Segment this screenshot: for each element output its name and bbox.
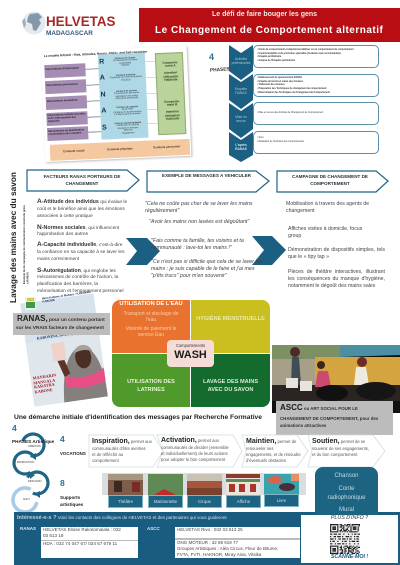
connector lines <box>86 61 158 133</box>
title banner <box>139 8 400 42</box>
text: RANAS factors <box>37 198 127 294</box>
quadrant: latrines: UTILISATION DES <box>127 379 175 385</box>
process: RANAS phases: Enquête <box>235 87 247 91</box>
WASH centre label: Comportements <box>176 343 205 348</box>
icon: globe <box>22 12 46 34</box>
label RANAS: RANAS <box>20 526 36 530</box>
phase chevrons <box>229 45 253 162</box>
factor attitude: A-Attitude des individus qui évalue le <box>37 198 127 205</box>
poster names: MANGALA <box>33 377 55 385</box>
phases text: PHASES <box>210 67 230 74</box>
vocation maintien: renouveler ses <box>246 446 273 451</box>
callout ASCC first line: ASCC ou ART SOCIAL POUR LE <box>280 402 358 412</box>
phases artistic label: PHASES Artistique <box>12 439 54 444</box>
label ASCC: ASCC <box>147 526 160 530</box>
context row: Contexte social <box>63 148 84 153</box>
phase 1 details: • Communicabilité et de promotion spécialisé (focalisée mais recommandée) <box>257 53 341 55</box>
number 4: 4 <box>60 434 65 444</box>
vocation inspiration <box>92 438 152 463</box>
phase 2 details: • Établissement du questionnaire RANAS <box>257 77 302 79</box>
behaviour column: Utilisation <box>163 74 178 78</box>
WASH centre label <box>167 340 214 367</box>
intervention boxes: Interventions d'information <box>45 67 79 71</box>
quadrant: water use <box>112 300 190 353</box>
quadrant: water use: Volonté de paiement le <box>126 326 176 332</box>
RANAS factors column: Facteurs de normes <box>116 90 137 93</box>
logo wordmark: HELVETAS <box>46 14 115 29</box>
RANAS contact box <box>41 527 138 558</box>
diagram title: Le modèle RANAS : Risk, Attitudes, Norms, Ability, and Self-regulation <box>44 50 147 58</box>
QR code <box>330 524 360 554</box>
poster caption: KABONINA, DELEQUE, CSB <box>37 330 87 341</box>
header 3 shape <box>276 170 389 193</box>
media item: radio <box>315 484 378 502</box>
label: 8 artistic supports <box>60 479 90 509</box>
arrow: messages to campaign <box>252 236 286 265</box>
label: theatre <box>108 495 143 508</box>
factor attitude: associées à cette pratique <box>37 214 93 219</box>
label: book: Livre <box>277 498 286 503</box>
callout ASCC text: CHANGEMENT DE COMPORTEMENT, pour des <box>280 416 378 421</box>
poster names: KARATRA <box>34 382 55 390</box>
image: book <box>264 474 299 495</box>
vocation maintien <box>246 437 310 465</box>
quadrant: handwashing: AVEC DU SAVON <box>208 386 253 392</box>
ASCC contact box: FVTA, FVTI, HAKNOR, Miray Aina, Vitsika <box>177 552 261 557</box>
QR box <box>301 515 398 563</box>
quadrant: menstrual hygiene: HYGIÈNE MENSTRUELLE <box>196 316 265 322</box>
chevron outlines <box>88 434 386 468</box>
supports text: artistiques <box>60 502 83 507</box>
factor norms <box>37 224 120 237</box>
column header 3 <box>276 170 389 193</box>
phase 1 details: • Choix du comportement et dépoiler/sensibiliser sur le comportement de comportement <box>257 49 354 51</box>
label: 4 phases <box>209 52 230 74</box>
RANAS factors column: R <box>99 58 104 66</box>
phase 4 details: • Évaluation de l'évolution des comportements <box>257 141 304 143</box>
QR heading: PLUS D'INFO ? <box>331 515 368 521</box>
WASH centre label: WASH <box>174 349 207 361</box>
banner title: Le Changement de Comportement alternatif <box>155 25 383 36</box>
vocation activation <box>161 436 229 462</box>
vocation inspiration: Inspiration, <box>92 438 130 445</box>
callout: ASCC <box>276 401 393 435</box>
header 3 text <box>292 174 368 186</box>
intervention boxes <box>44 63 88 141</box>
column header 1 <box>26 169 140 192</box>
RANAS factors column: S <box>102 124 107 132</box>
phase 4 details: • Suivi <box>257 137 263 139</box>
phase 3 details <box>253 102 379 125</box>
header 2 shape <box>146 170 270 193</box>
poster names <box>32 372 56 394</box>
process: RANAS phases: œuvre <box>236 119 246 123</box>
callout ASCC text <box>280 416 378 428</box>
vocation chevrons <box>88 434 386 468</box>
arrow: factors to messages <box>126 238 160 265</box>
vocation soutien: Soutien, <box>312 438 340 445</box>
media item: song: Chanson <box>334 472 359 478</box>
phase 2 details: • Détermination des Techniques de Changement de Comportement <box>257 92 330 94</box>
header 2 text: EXEMPLE DE MESSAGES A VEHICULER <box>162 173 251 178</box>
campaign item 3: Démonstration de dispositifs simples, tels que le « tipy tap » <box>288 247 385 260</box>
vocation maintien: engagements, et de résoudre <box>246 452 301 457</box>
factor self-regulation: mémorisation et l'engagement personnel <box>37 289 124 294</box>
label: puppet <box>148 495 183 508</box>
phase 1 details: • Analyse de l'Enquête préliminaire <box>257 60 295 62</box>
quadrant: latrines: LATRINES <box>137 386 165 392</box>
factor attitude: coût et le bénéfice ainsi que les émotions <box>37 207 125 212</box>
logo subtitle: MADAGASCAR <box>46 30 93 37</box>
factor norms: N-Normes sociales, qui influencent <box>37 224 119 230</box>
phase labels: préliminaires <box>232 61 250 65</box>
intervention boxes: Interventions infrastructurelles et de renforcement des capacités <box>47 112 86 123</box>
vocation maintien: d'éventuels obstacles <box>246 458 286 463</box>
diagram: RANAS model <box>41 46 191 162</box>
factor self-regulation: mécanismes de contrôle de l'action, la <box>37 275 118 280</box>
RANAS factors column: Comportement des autres <box>114 92 139 96</box>
RANAS factors column: Barrières et solutions <box>118 127 138 130</box>
factor self-regulation: planification des barrières, la <box>37 282 98 287</box>
phase 3 details: • Mise en œuvre des Activités de Changement de Comportement <box>257 112 323 114</box>
text: campaign <box>286 201 385 289</box>
vocation maintien: permet de <box>278 439 296 444</box>
poster names: MANDARIN <box>32 372 56 381</box>
heading: formative research: Une démarche initiale d'identification des messages par Recherche Formative <box>14 414 262 421</box>
context row: Contexte personnel <box>153 144 180 149</box>
RANAS factors column: Sévérité <box>121 65 129 67</box>
WASH matrix <box>112 300 270 407</box>
phase 2 details: • Préparation des Techniques de changement de comportement <box>257 88 326 90</box>
poster banner small: Mimi Kabone et Mahara • KARAKRA KABONE <box>42 290 91 304</box>
campaign item 1: Mobilisation à travers des agents de changement <box>286 201 369 214</box>
context row: Contexte physique <box>107 146 133 151</box>
phase 2 details: • Enquête de terrain et saisie des données <box>257 81 303 83</box>
RANAS factors column: Confiance en la performance <box>113 111 141 114</box>
behaviour column: Utilisation <box>165 113 180 117</box>
vocation inspiration: comportement <box>92 458 119 463</box>
vocation inspiration: et de réfléchir au <box>92 452 123 457</box>
message 3: "Fais comme ta famille, tes voisins et ta communauté : lave-toi les mains !" <box>151 238 244 251</box>
phase 1 details <box>253 45 379 68</box>
contact heading: Intéressé-e-s ? Voici les contacts des collègues de HELVETAS et des partenaires qui vous guideront <box>17 514 227 520</box>
ASCC contact box: HELVETAS Rivo : 032 03 613 25 <box>177 527 243 532</box>
quadrant: handwashing: LAVAGE DES MAINS <box>203 379 258 385</box>
behaviour column: Comporte- <box>164 99 180 104</box>
RANAS factors column: Vulnérabilité <box>119 62 131 65</box>
supports text <box>60 495 83 509</box>
contact panel <box>14 512 400 565</box>
icon: small logo <box>25 297 36 310</box>
image: puppet <box>148 474 183 495</box>
media item: radio: radiophonique <box>327 494 366 500</box>
stage: suivi: SUIVI <box>23 498 30 501</box>
behaviour column: Habitude <box>166 116 179 121</box>
column header 2 <box>146 170 270 193</box>
RANAS factors column: Facteurs d'autorégulation <box>114 122 141 125</box>
vocation soutien <box>312 437 376 458</box>
label: circus: Cirque <box>198 499 211 504</box>
image: poster <box>226 474 260 495</box>
campaign item 2 <box>288 226 362 239</box>
logo: Helvetas Madagascar <box>22 12 115 37</box>
context row <box>50 139 190 161</box>
RANAS factors column: Approbation des autres <box>115 95 138 98</box>
stage: production: PRODUCTION <box>17 461 34 464</box>
media item: radio: Conte <box>338 486 354 492</box>
RANAS contact box: 03 613 18 <box>43 533 63 538</box>
artistic supports gallery <box>102 472 307 509</box>
behaviour column <box>155 52 186 135</box>
media list <box>315 467 378 515</box>
RANAS factors column: Confiance dans le maintien <box>114 113 141 116</box>
RANAS factors column: Croyances sur coûts et bénéfices <box>110 76 142 80</box>
gallery strip <box>102 473 306 495</box>
RANAS contact box: HELVETAS Eloise Rakotomalala : 032 <box>43 527 121 532</box>
behaviour column: ment A <box>165 64 176 68</box>
banner subtitle: Le défi de faire bouger les gens <box>212 11 317 18</box>
image: circus <box>187 474 222 495</box>
phase 2 details <box>253 74 379 97</box>
vocation soutien: permet de se <box>341 439 365 444</box>
RANAS factors column: Connaissances du risque <box>113 59 137 63</box>
quadrant: water use: UTILISATION DE L'EAU <box>119 301 183 307</box>
RANAS factors column: Émotions <box>121 79 131 82</box>
header 1 shape <box>26 169 140 192</box>
callout second line: sur les VRAIS facteurs de changement <box>16 326 104 331</box>
vocation maintien: Maintien, <box>246 438 276 445</box>
vocation activation: communautés de décider (ensemble <box>161 445 229 450</box>
message 1: "Cela ne coûte pas cher de se laver les mains régulièrement" <box>145 201 253 214</box>
label: 4 vocations <box>60 434 86 456</box>
intervention boxes: Interventions de planification et prévention des rechutes <box>48 128 84 136</box>
process: RANAS phases <box>229 45 379 162</box>
label: theatre: Théâtre <box>118 499 133 504</box>
factor ability <box>37 241 124 262</box>
label: poster <box>226 495 261 508</box>
number 4: 4 <box>12 423 17 433</box>
process: RANAS phases: RANAS <box>235 147 247 151</box>
poster figure <box>26 335 108 406</box>
text: example messages <box>145 201 262 279</box>
process: RANAS phases: L'après <box>235 143 247 147</box>
factor attitude <box>37 198 127 219</box>
media item: mural: Mural <box>339 506 354 512</box>
header 3 text: CAMPAGNE DE CHANGEMENT DE <box>292 174 368 178</box>
image: theatre <box>108 474 143 495</box>
factor ability: A-Capacité individuelle, c'est-à-dire <box>37 241 122 248</box>
RANAS factors column <box>98 53 148 140</box>
RANAS factors column: Mémoire <box>124 130 132 132</box>
campaign item 2: Affiches visites à domicile, focus <box>288 226 362 232</box>
RANAS factors column: Importance personnelle <box>115 97 138 100</box>
header 3 text: COMPORTEMENT <box>310 181 350 186</box>
quadrant: water use: l'eau <box>146 317 156 323</box>
QR footer: SCANNE-MOI ! <box>331 554 368 560</box>
vocation soutien: et du bon comportement <box>312 452 357 457</box>
message 4: "Ce n'est pas si difficile que cela de se laver les mains : je suis capable de le faire et j'ai mes "p'tits trucs" pour m'en souvenir" <box>151 259 262 279</box>
behaviour column: Habitude <box>164 77 178 82</box>
RANAS factors column: A <box>101 107 107 115</box>
stage: creation: CRÉATION <box>28 445 41 448</box>
phase 4 details <box>253 131 379 154</box>
intervention boxes: Interventions normatives <box>47 99 78 103</box>
label: poster: Affiche <box>237 499 250 504</box>
number 8: 8 <box>60 478 65 488</box>
campaign item 2: group <box>288 233 301 239</box>
photo: street theatre <box>272 345 400 413</box>
quadrant: handwashing <box>191 354 270 407</box>
diagram: artistic phases <box>11 423 54 512</box>
RANAS factors column: Facteurs d'attitude <box>116 74 136 77</box>
supports text: Supports <box>60 495 80 500</box>
behaviour column: Intention <box>164 70 177 75</box>
number 4: 4 <box>209 52 214 62</box>
factor norms: l'approbation des autres <box>37 232 88 237</box>
label: puppet: Marionnette <box>154 499 177 504</box>
behaviour column: Intention <box>166 109 179 114</box>
phase 2 details: • Traitement des données <box>257 84 285 86</box>
vertical caption: Exemple de de campagne de communication construite grâce à RANAS <box>23 205 29 284</box>
process: RANAS phases: RANAS <box>235 91 247 95</box>
RANAS factors column: Savoir-faire <box>122 109 133 111</box>
ASCC contact box <box>175 527 300 558</box>
campaign item 4: Pièces de théâtre interactives, illustrant les conséquences du manque d'hygiène, notamment le dégoût des mains sales <box>288 269 385 289</box>
callout text: RANAS, pour un contenu portant <box>17 314 105 322</box>
cycle arrows <box>11 432 50 512</box>
phase labels <box>232 57 250 65</box>
RANAS factors column: Engagement <box>122 132 135 134</box>
behaviour column: Comporte- <box>162 60 178 65</box>
vocation inspiration: permet aux <box>131 439 152 444</box>
factor self-regulation: S-Autorégulation, qui englobe les <box>37 266 116 274</box>
process: RANAS phases: Mise en <box>235 115 247 119</box>
quadrant: latrines <box>112 354 190 407</box>
ASCC contact box: Groupes Artistiques : Aléa Circus, Fleur de Bitume, <box>177 546 278 551</box>
stage: diffusion: DIFFUSION <box>28 480 41 483</box>
ASCC contact box: ONG MOTEUR : 32 88 919 77 <box>177 540 238 544</box>
RANAS factors column: Facteurs de capacité <box>116 106 138 109</box>
intervention boxes: Interventions persuasives <box>46 83 78 87</box>
RANAS factors column: Planification et contrôle <box>117 124 139 127</box>
phase labels: Activités <box>235 57 247 61</box>
vocation inspiration: communautés d'être averties <box>92 446 146 451</box>
message 2: "Avoir les mains non lavées est dégoûtant" <box>149 219 249 225</box>
poster photo <box>20 293 108 407</box>
phase 1 details: • Enquête préliminaire <box>257 56 281 58</box>
factor self-regulation <box>37 266 124 294</box>
callout: RANAS <box>13 313 110 335</box>
vocation activation: pour adopter le bon comportement <box>161 457 225 462</box>
RANAS factors column: Facteurs de risques <box>115 57 135 60</box>
quadrant: menstrual hygiene <box>191 300 270 353</box>
header 1 text: FACTEURS RANAS PORTEURS DE <box>44 174 120 178</box>
RANAS factors column: A <box>100 74 105 82</box>
vocations text: VOCATIONS <box>60 451 86 456</box>
behaviour column: ment B <box>167 103 177 107</box>
quadrant: water use: Transport et stockage de <box>123 311 179 317</box>
callout ASCC text: animations attractives <box>280 423 326 428</box>
label: circus <box>187 495 222 508</box>
vocation activation: et individuellement) de leurs actions <box>161 451 228 456</box>
factor ability: la confiance en sa capacité à se laver les <box>37 250 124 255</box>
RANAS factors column: N <box>100 91 106 99</box>
quadrant: water use: service Eau <box>138 332 164 338</box>
poster names: KABONE <box>34 387 53 394</box>
RANAS contact box: HDA : 032 74 047 67/ 034 57 679 11 <box>43 540 117 546</box>
header 1 text: CHANGEMENT <box>66 181 98 186</box>
label: book <box>264 494 299 507</box>
vocation activation: Activation, <box>161 437 197 444</box>
header 1 text <box>44 174 120 186</box>
vertical heading: Lavage des mains avec du savon <box>8 172 18 303</box>
vocation soutien: souvenir de ses engagements, <box>312 446 369 451</box>
vocation activation: permet aux <box>198 438 219 443</box>
factor ability: mains correctement <box>37 257 79 262</box>
